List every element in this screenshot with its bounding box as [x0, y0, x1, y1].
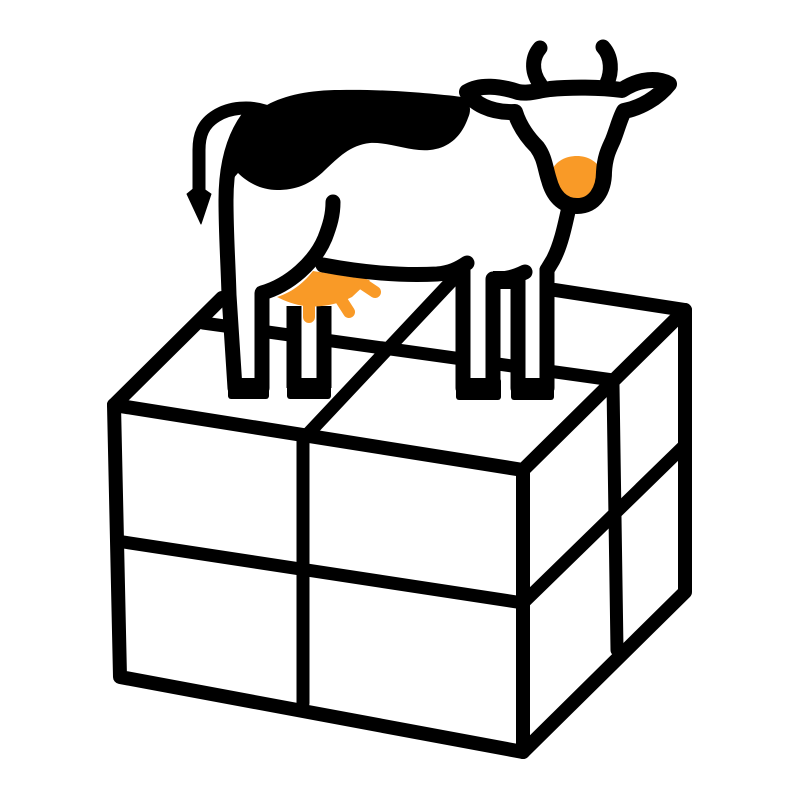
cow muzzle patch [552, 156, 601, 202]
cow body white fill [224, 78, 672, 392]
cow head [467, 80, 669, 206]
cow second rear leg [287, 306, 331, 399]
icon: segmented cube [114, 270, 685, 752]
cow tail [187, 108, 265, 224]
icon: cow [187, 47, 672, 400]
cow udder [277, 271, 375, 317]
cow rear leg and haunch [226, 118, 333, 399]
cow front legs and neck [456, 207, 569, 400]
cow black spot [232, 90, 470, 190]
cow horns [534, 47, 610, 84]
cow belly [323, 263, 467, 275]
